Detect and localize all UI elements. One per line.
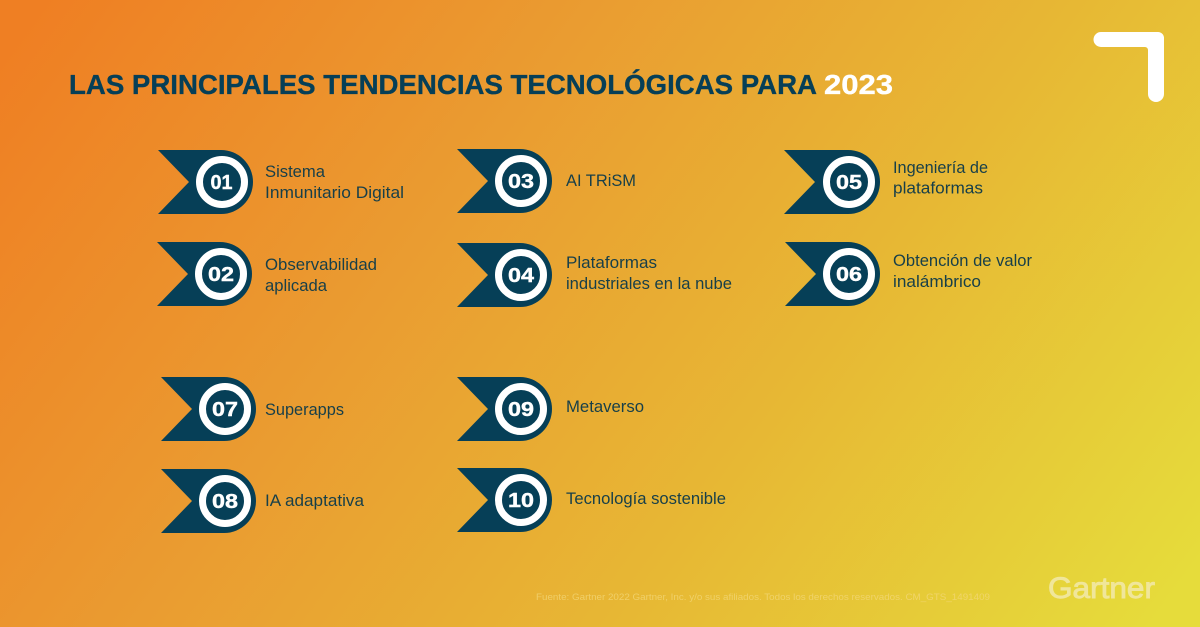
item 05 (784, 150, 988, 214)
item 05: plataformas (893, 180, 983, 198)
item 04: 04 (508, 265, 535, 287)
item 02: aplicada (265, 277, 328, 295)
item 03: AI TRiSM (566, 172, 636, 190)
icon: corner bracket (1094, 32, 1164, 102)
item 08: 08 (212, 491, 238, 513)
item 07 (161, 377, 344, 441)
item 04: Plataformas (566, 254, 657, 272)
title: LAS PRINCIPALES TENDENCIAS TECNOLÓGICAS PARA (69, 69, 817, 100)
item 01 (158, 150, 404, 214)
item 02: Observabilidad (265, 256, 377, 274)
item 06: 06 (836, 264, 862, 286)
item 04 (457, 243, 732, 307)
item 02: 02 (208, 264, 234, 286)
item 03: 03 (508, 171, 534, 193)
item 09: Metaverso (566, 398, 644, 416)
item 07: Superapps (265, 401, 344, 419)
item 10: 10 (508, 490, 534, 512)
item 06: Obtención de valor (893, 252, 1032, 270)
item 10: Tecnología sostenible (566, 490, 726, 508)
item 01: Inmunitario Digital (265, 184, 404, 202)
item 05: Ingeniería de (893, 159, 988, 177)
item 08: IA adaptativa (265, 492, 365, 510)
item 03 (457, 149, 636, 213)
item 09 (457, 377, 644, 441)
item 02 (157, 242, 377, 306)
item 04: industriales en la nube (566, 275, 732, 293)
source note: Fuente: Gartner 2022 Gartner, Inc. y/o sus afiliados. Todos los derechos reservados. CM_GTS_1491409 (536, 592, 990, 603)
item 07: 07 (212, 399, 238, 421)
item 01: Sistema (265, 163, 326, 181)
item 01: 01 (210, 172, 232, 194)
title: 2023 (824, 69, 893, 100)
item 06 (785, 242, 1032, 306)
item 08 (161, 469, 365, 533)
Gartner logo: Gartner (1048, 572, 1155, 605)
item 10 (457, 468, 726, 532)
item 05: 05 (836, 172, 862, 194)
item 06: inalámbrico (893, 273, 981, 291)
item 09: 09 (508, 399, 534, 421)
